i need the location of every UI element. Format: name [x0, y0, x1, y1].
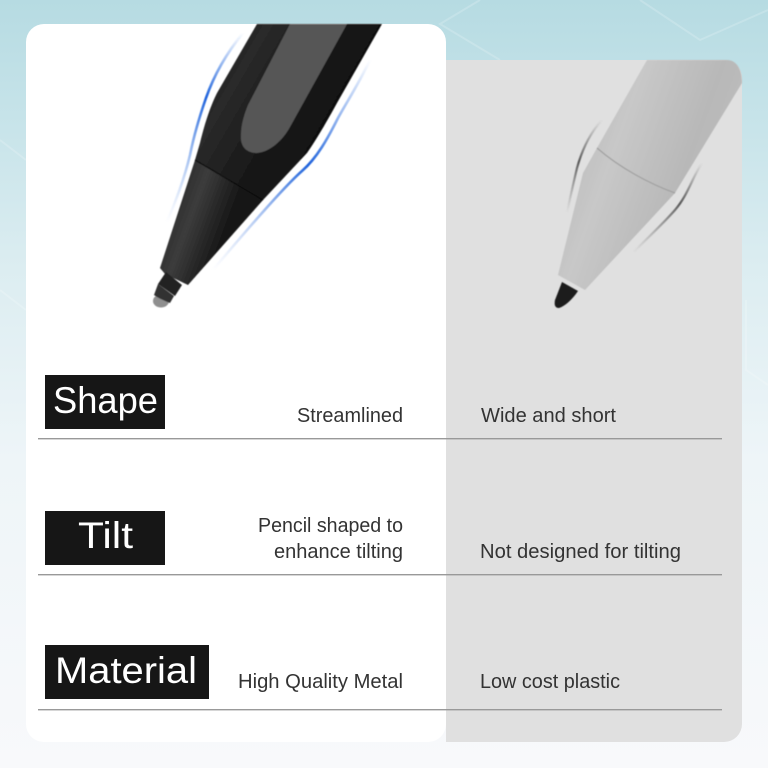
divider 2 [38, 574, 722, 575]
label: Tilt: Tilt [78, 515, 134, 556]
grip [241, 24, 347, 153]
barrel and cone [558, 60, 742, 290]
text: Pencil shaped to enhance tilting: Pencil shaped to [258, 515, 403, 537]
divider 1 [38, 438, 722, 439]
icon: black stylus [153, 24, 382, 308]
text: High Quality Metal: High Quality Metal [238, 671, 403, 693]
barrel [195, 24, 382, 200]
tip [555, 282, 578, 308]
seam [195, 160, 263, 200]
row: shape [45, 375, 616, 429]
label: Material [45, 645, 209, 699]
motion line: blue left [167, 33, 243, 222]
text: Wide and short: Wide and short [481, 405, 616, 427]
seam [597, 148, 675, 193]
label: Material: Material [55, 650, 197, 691]
label: Shape: Shape [53, 380, 158, 421]
text: Pencil shaped to enhance tilting: enhance tilting [274, 541, 403, 563]
panel: grey card [446, 60, 742, 742]
motion line: dark left [567, 120, 602, 213]
panel: white card [26, 24, 446, 742]
nib [153, 272, 182, 308]
text: Not designed for tilting: Not designed for tilting [480, 541, 681, 563]
text: Pencil shaped to enhance tilting [258, 515, 403, 563]
label: Tilt [45, 511, 165, 565]
label: Shape [45, 375, 165, 429]
divider 3 [38, 709, 722, 710]
text: Streamlined: Streamlined [297, 405, 403, 427]
cone [160, 160, 263, 285]
motion line: dark right [633, 163, 702, 253]
row: material [45, 645, 620, 699]
motion line: blue right [213, 60, 370, 270]
text: Low cost plastic: Low cost plastic [480, 671, 620, 693]
row: tilt [45, 511, 681, 565]
icon: grey stylus [555, 60, 742, 308]
